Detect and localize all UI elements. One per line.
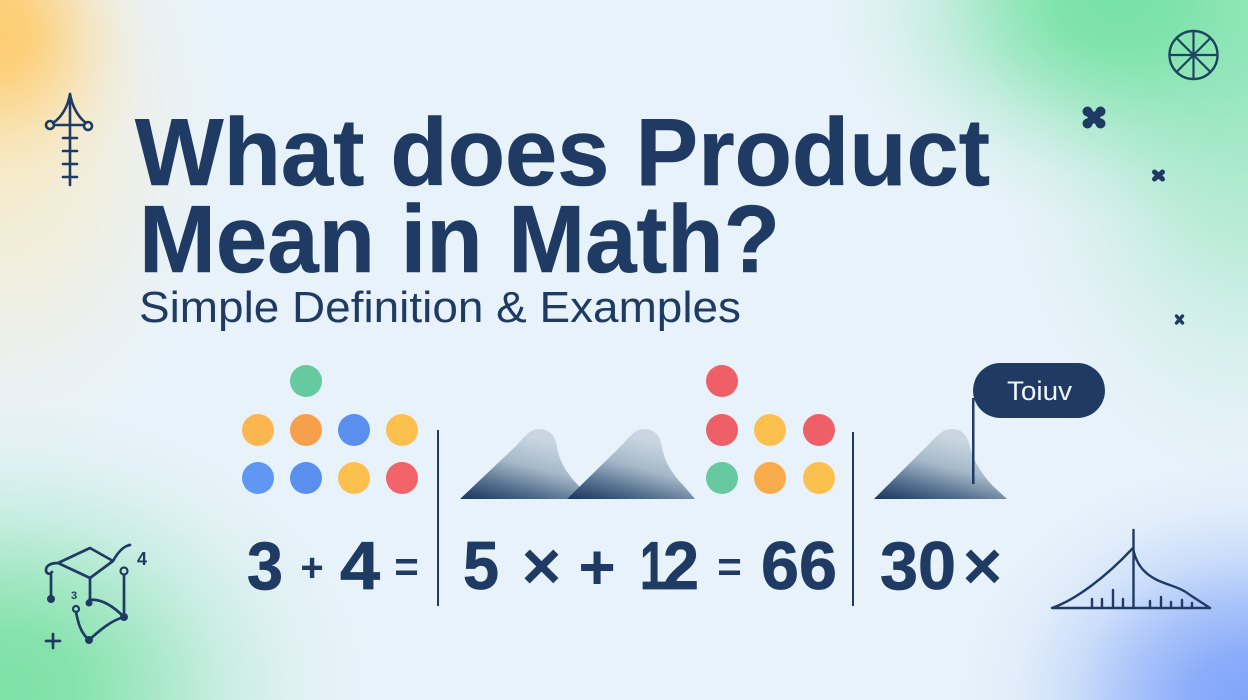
icon: geometric cube: 3: [71, 590, 77, 602]
divider right: [852, 432, 854, 606]
divider left: [437, 430, 439, 606]
equation: 5 × + 12 = 66: [463, 528, 837, 604]
title: What does Product: [135, 99, 990, 206]
right dot group: [706, 365, 835, 494]
equation: 3 + 4 =: [247, 528, 419, 604]
icon: compass arrow: [46, 94, 92, 185]
equation: 3 + 4 =: 3: [247, 528, 283, 604]
icon: wheel: [1170, 31, 1218, 79]
equation: 30 ×: 30: [880, 528, 956, 604]
equation: 3 + 4 =: +: [300, 546, 324, 590]
flag label: Toiuv: [1007, 376, 1073, 406]
icon: medium cross: [1154, 172, 1162, 179]
icon: small cross: [1176, 316, 1182, 323]
equation: 5 × + 12 = 66: 66: [761, 528, 837, 604]
equation: 30 ×: ×: [963, 528, 1002, 604]
equation: 5 × + 12 = 66: +: [578, 531, 616, 603]
equation: 30 ×: [880, 528, 1002, 604]
mountain shapes: pair: [460, 429, 695, 499]
title: [135, 99, 990, 293]
icon: large cross: [1082, 106, 1106, 128]
icon: geometric cube: 4: [137, 549, 147, 569]
equation: 3 + 4 =: =: [394, 543, 419, 590]
equation: 3 + 4 =: 4: [340, 528, 380, 604]
equation: 5 × + 12 = 66: 2: [663, 528, 699, 604]
flag pole: [972, 398, 974, 484]
equation: 5 × + 12 = 66: 1: [640, 528, 666, 604]
mountain with flag: [874, 363, 1105, 499]
title: Mean in Math?: [139, 186, 780, 293]
flag label: [973, 363, 1105, 418]
icon: geometric cube: [46, 545, 147, 648]
subtitle: Simple Definition & Examples: [139, 283, 741, 332]
equation: 5 × + 12 = 66: =: [717, 543, 742, 590]
equation: 5 × + 12 = 66: ×: [522, 528, 561, 604]
equation: 5 × + 12 = 66: 5: [463, 528, 499, 604]
icon: bell curve ruler: [1052, 530, 1210, 608]
left dot group: [242, 365, 418, 494]
